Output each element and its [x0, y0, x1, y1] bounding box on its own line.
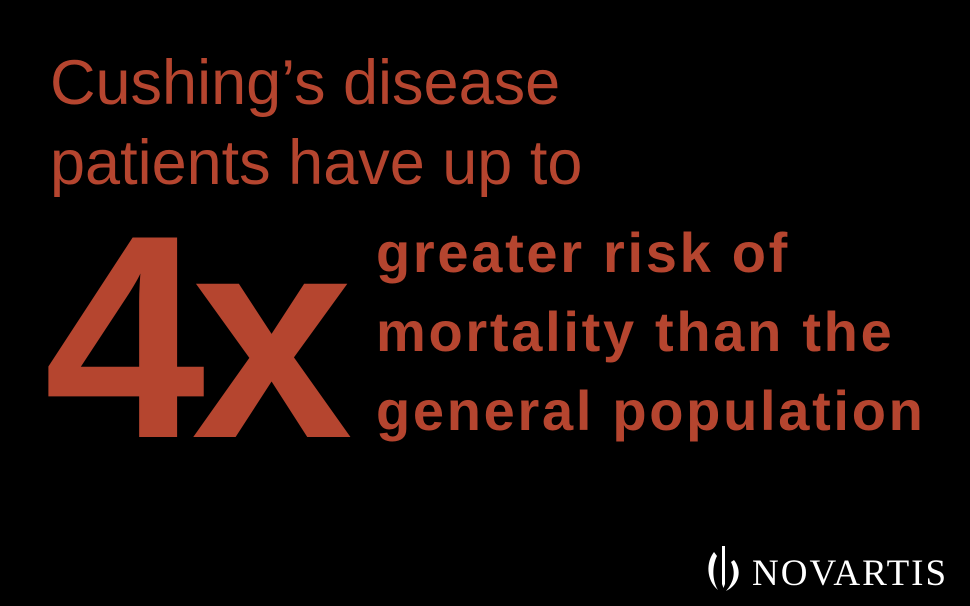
- logo text: NOVARTIS: [752, 553, 948, 594]
- text block: risk statement: general population: [376, 379, 926, 442]
- big number 4x: 4x: [44, 175, 339, 499]
- heading: intro text: patients have up to: [50, 128, 582, 198]
- heading: intro text: Cushing’s disease: [50, 48, 560, 118]
- heading: intro text: [50, 48, 582, 198]
- icon: novartis flame: [708, 546, 739, 591]
- logo: Novartis: [708, 546, 948, 594]
- text block: risk statement: mortality than the: [376, 300, 894, 363]
- text block: risk statement: [376, 221, 926, 442]
- text block: risk statement: greater risk of: [376, 221, 790, 284]
